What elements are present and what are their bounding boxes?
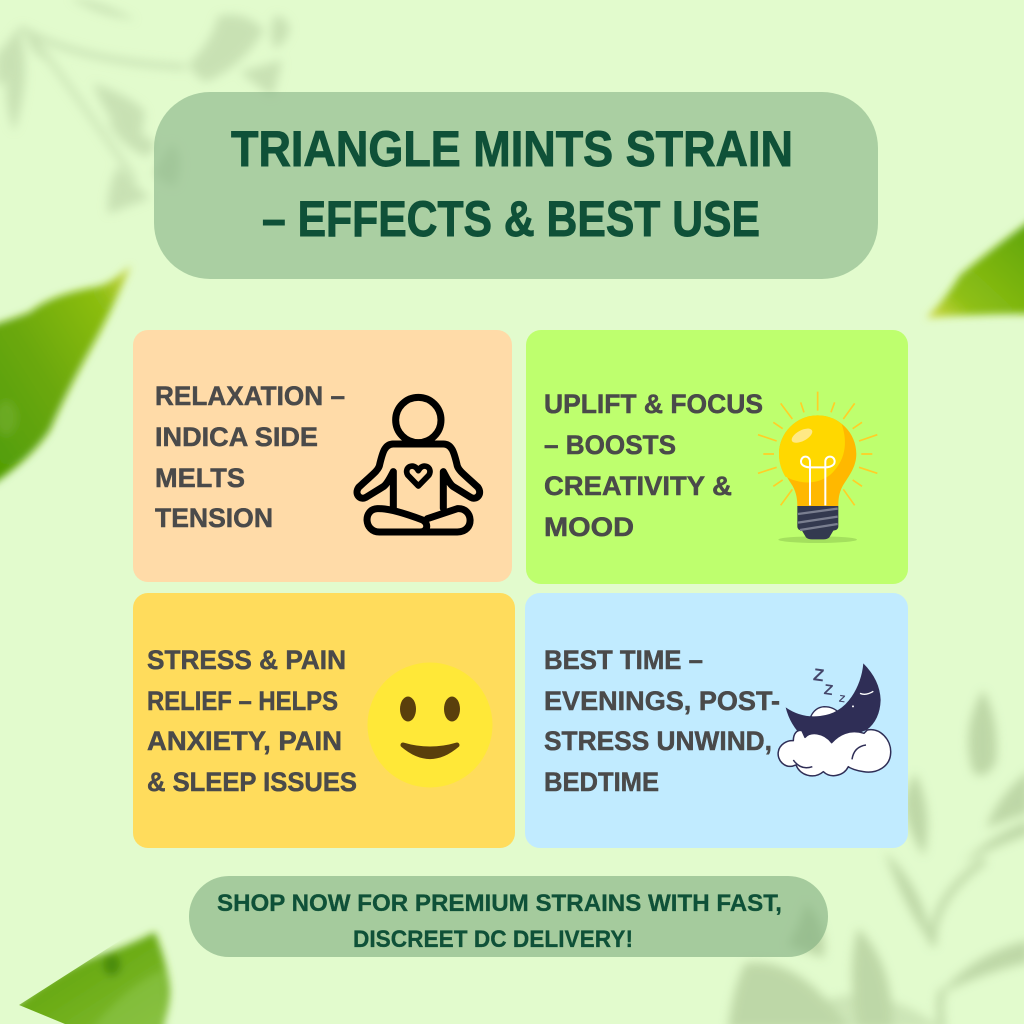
leaf: top right — [926, 218, 1024, 318]
relaxation text: MELTS — [155, 463, 245, 493]
uplift text: CREATIVITY & — [544, 471, 732, 501]
uplift text: – BOOSTS — [544, 430, 676, 460]
leaf shadow: top left branch — [0, 0, 289, 214]
footer panel — [189, 876, 828, 957]
icon: light bulb — [758, 392, 877, 543]
icon: sleeping moon on cloud: Z — [838, 694, 846, 705]
footer call to action text: SHOP NOW FOR PREMIUM STRAINS WITH FAST, — [217, 890, 782, 917]
best time text: BEST TIME – — [544, 645, 703, 675]
footer call to action text — [217, 890, 782, 953]
best time text: STRESS UNWIND, — [544, 726, 772, 756]
stress text: STRESS & PAIN — [147, 645, 346, 675]
icon: sleeping moon on cloud — [778, 663, 891, 776]
icon: meditating person — [357, 397, 480, 532]
leaf shadow: bottom right branch — [728, 690, 1024, 1024]
best time text: BEDTIME — [544, 767, 659, 797]
uplift text: UPLIFT & FOCUS — [544, 389, 763, 419]
uplift text: MOOD — [544, 512, 634, 542]
icon: smiley face — [368, 662, 492, 788]
panel: best time — [525, 593, 908, 848]
stress text — [147, 645, 357, 797]
relaxation text: TENSION — [155, 503, 273, 533]
relaxation text — [155, 381, 345, 533]
title text: TRIANGLE MINTS STRAIN — [231, 121, 793, 177]
icon: sleeping moon on cloud: Z — [823, 682, 834, 699]
best time text: EVENINGS, POST- — [544, 686, 780, 716]
best time text — [544, 645, 780, 797]
title panel — [154, 92, 878, 279]
panel: stress and pain relief — [133, 593, 515, 848]
relaxation text: INDICA SIDE — [155, 422, 318, 452]
title text — [231, 121, 793, 247]
title text: – EFFECTS & BEST USE — [262, 191, 760, 247]
leaf: bottom left — [10, 932, 170, 1024]
panel: uplift and focus — [526, 330, 908, 584]
relaxation text: RELAXATION – — [155, 381, 345, 411]
stress text: & SLEEP ISSUES — [147, 767, 357, 797]
stress text: ANXIETY, PAIN — [147, 726, 342, 756]
panel: relaxation — [133, 330, 512, 582]
footer call to action text: DISCREET DC DELIVERY! — [353, 926, 633, 953]
leaf: left — [0, 265, 131, 486]
icon: sleeping moon on cloud: Z — [812, 664, 826, 685]
stress text: RELIEF – HELPS — [147, 686, 338, 716]
uplift text — [544, 389, 763, 542]
